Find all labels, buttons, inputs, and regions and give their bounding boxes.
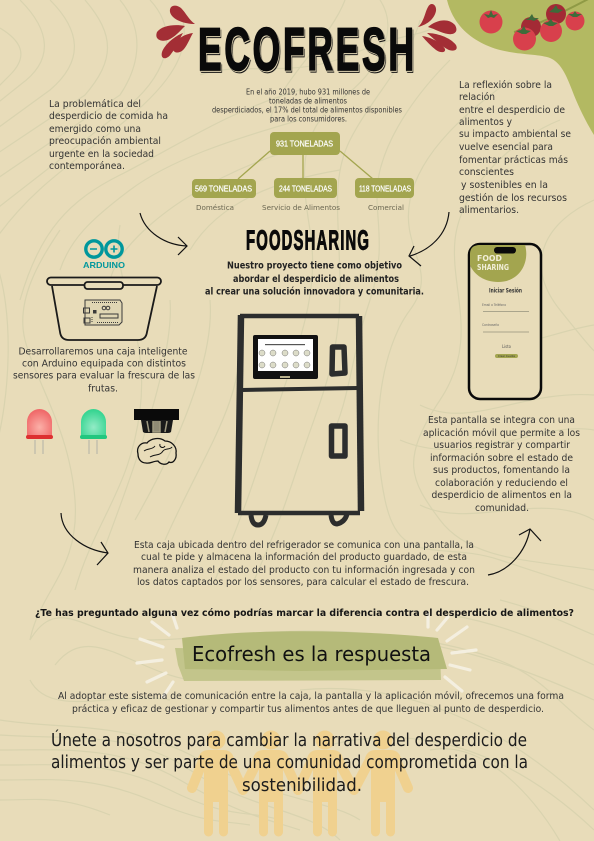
text block: proposal summary: práctica y eficaz de gestionar y compartir tus alimentos antes de que lleguen al punto de desperdicio. <box>72 703 544 715</box>
icon: green led <box>80 409 107 454</box>
icon: smart box with arduino board <box>47 278 161 340</box>
text block: 2019 waste statistic: En el año 2019, hubo 931 millones de <box>246 88 370 96</box>
text block: mobile app description: sus productos, fomentando la <box>433 465 570 476</box>
call to action <box>51 729 528 796</box>
text block: food waste problem: contemporánea. <box>49 160 125 172</box>
arrow: to foodsharing from left <box>140 213 187 255</box>
title: ECOFRESH <box>198 16 414 83</box>
text block: screen description: manera analiza el estado del producto con tu información ingresada y con <box>133 564 475 576</box>
icon: mobile phone login screen: Crear Cuenta <box>498 354 515 358</box>
text block: smart box description: frutas. <box>88 384 118 394</box>
text block: mobile app description <box>423 415 580 514</box>
corner: green blob with tomatoes <box>447 0 594 135</box>
text block: reflection on environmental impact: conscientes <box>459 167 514 178</box>
text block: reflection on environmental impact: relación <box>459 91 495 103</box>
icon: arduino board <box>84 300 122 325</box>
text block: reflection on environmental impact: gestión de los recursos <box>459 192 567 204</box>
text block: food waste problem <box>49 98 168 172</box>
box: domestic: Doméstica <box>196 203 234 212</box>
text block: screen description: cual te pide y almacena la información del producto guardado, de esta <box>141 551 467 563</box>
text block: mobile app description: Esta pantalla se integra con una <box>428 415 575 426</box>
text block: mobile app description: comunidad. <box>475 503 529 514</box>
text block: project goal: al crear una solución innovadora y comunitaria. <box>205 286 424 298</box>
call to action: sostenibilidad. <box>242 776 362 796</box>
heading: foodsharing: FOODSHARING <box>246 225 369 256</box>
icon: mobile phone login screen: FOOD <box>477 254 502 263</box>
arrow: from text to phone app <box>488 529 541 575</box>
text block: reflection on environmental impact: La reflexión sobre la <box>459 79 552 91</box>
text block: reflection on environmental impact: vuelve esencial para <box>459 142 553 153</box>
text block: food waste problem: La problemática del <box>49 98 141 110</box>
text block: project goal <box>205 260 424 298</box>
text block: reflection on environmental impact: alimentarios. <box>459 205 519 216</box>
text block: project goal: Nuestro proyecto tiene como objetivo <box>227 260 402 272</box>
box: food service <box>262 178 340 212</box>
text block: screen description <box>133 540 475 588</box>
arrow: from box to screen text <box>61 513 108 565</box>
question heading: ¿Te has preguntado alguna vez cómo podrías marcar la diferencia contra el desperdicio de alimentos? <box>35 607 574 619</box>
box: commercial: Comercial <box>368 203 404 212</box>
text block: 2019 waste statistic <box>212 88 402 124</box>
text block: proposal summary <box>58 690 564 715</box>
icon: mobile phone login screen: SHARING <box>477 263 509 272</box>
text block: reflection on environmental impact <box>459 79 571 216</box>
text block: reflection on environmental impact: su impacto ambiental se <box>459 129 571 140</box>
text block: mobile app description: usuarios registrar y compartir <box>434 440 571 451</box>
icon: mobile phone login screen: Contraseña <box>482 323 499 327</box>
box: total <box>270 132 340 155</box>
text block: smart box description: con Arduino equipada con distintos <box>22 358 186 370</box>
text block: mobile app description: aplicación móvil que permite a los <box>423 427 580 439</box>
text block: reflection on environmental impact: alimentos y <box>459 117 512 128</box>
box: domestic <box>192 179 256 212</box>
text block: food waste problem: urgente en la sociedad <box>49 149 154 160</box>
text block: 2019 waste statistic: toneladas de alimentos <box>269 96 347 106</box>
text block: project goal: abordar el desperdicio de alimentos <box>233 274 399 285</box>
call to action: Únete a nosotros para cambiar la narrativa del desperdicio de <box>51 729 527 751</box>
banner: ecofresh es la respuesta <box>137 613 476 697</box>
decoration: right red splash <box>418 4 457 52</box>
text block: reflection on environmental impact: y sostenibles en la <box>461 180 548 191</box>
screen: tablet in fridge door <box>253 335 318 379</box>
icon: mobile phone login screen: Listo <box>502 344 511 350</box>
box: commercial: 118 TONELADAS <box>359 184 411 194</box>
text block: smart box description <box>13 346 195 394</box>
text block: food waste problem: preocupación ambiental <box>49 135 161 147</box>
box: commercial <box>355 178 414 212</box>
text block: screen description: los datos captados por los sensores, para calcular el estado de frescura. <box>137 577 469 588</box>
icon: mobile phone login screen: Email o Teléfono <box>482 303 506 307</box>
text block: reflection on environmental impact: entre el desperdicio de <box>459 105 565 116</box>
text block: smart box description: Desarrollaremos una caja inteligente <box>18 346 188 358</box>
diagram: tonnage tree <box>192 132 414 212</box>
icon: refrigerator <box>238 315 361 525</box>
box: food service: 244 TONELADAS <box>279 184 332 194</box>
banner: ecofresh es la respuesta: Ecofresh es la respuesta <box>192 642 431 666</box>
decoration: sun rays <box>137 613 476 697</box>
text block: smart box description: sensores para evaluar la frescura de las <box>13 370 195 382</box>
text block: food waste problem: desperdicio de comida ha <box>49 111 168 122</box>
text block: food waste problem: emergido como una <box>49 124 141 135</box>
arrow: to foodsharing from right <box>409 212 449 266</box>
box: total: 931 TONELADAS <box>276 140 333 148</box>
box: domestic: 569 TONELADAS <box>195 184 252 194</box>
logo: arduino: ARDUINO <box>83 260 125 270</box>
text block: mobile app description: información sobre el estado de <box>430 452 573 464</box>
illustration: people holding hands <box>192 730 408 836</box>
text block: mobile app description: colaboración y reduciendo el <box>435 477 568 489</box>
text block: 2019 waste statistic: para los consumidores. <box>270 114 347 124</box>
icon: red led <box>26 409 53 454</box>
icon: sensor and brain <box>134 409 179 464</box>
call to action: alimentos y ser parte de una comunidad comprometida con la <box>51 753 528 773</box>
logo: arduino <box>83 241 125 270</box>
text block: reflection on environmental impact: fomentar prácticas más <box>459 154 568 166</box>
icon: mobile phone login screen <box>469 244 541 399</box>
box: food service: Servicio de Alimentos <box>262 203 340 212</box>
text block: mobile app description: desperdicio de alimentos en la <box>432 490 572 501</box>
text block: 2019 waste statistic: desperdiciados, el 17% del total de alimentos disponibles <box>212 106 402 114</box>
decoration: left red splash <box>156 6 195 58</box>
text block: screen description: Esta caja ubicada dentro del refrigerador se comunica con una pantalla, la <box>134 540 474 551</box>
icon: mobile phone login screen: Iniciar Sesión <box>489 288 522 294</box>
text block: proposal summary: Al adoptar este sistema de comunicación entre la caja, la pantalla y la aplicación móvil, ofrecemos una forma <box>58 690 564 702</box>
